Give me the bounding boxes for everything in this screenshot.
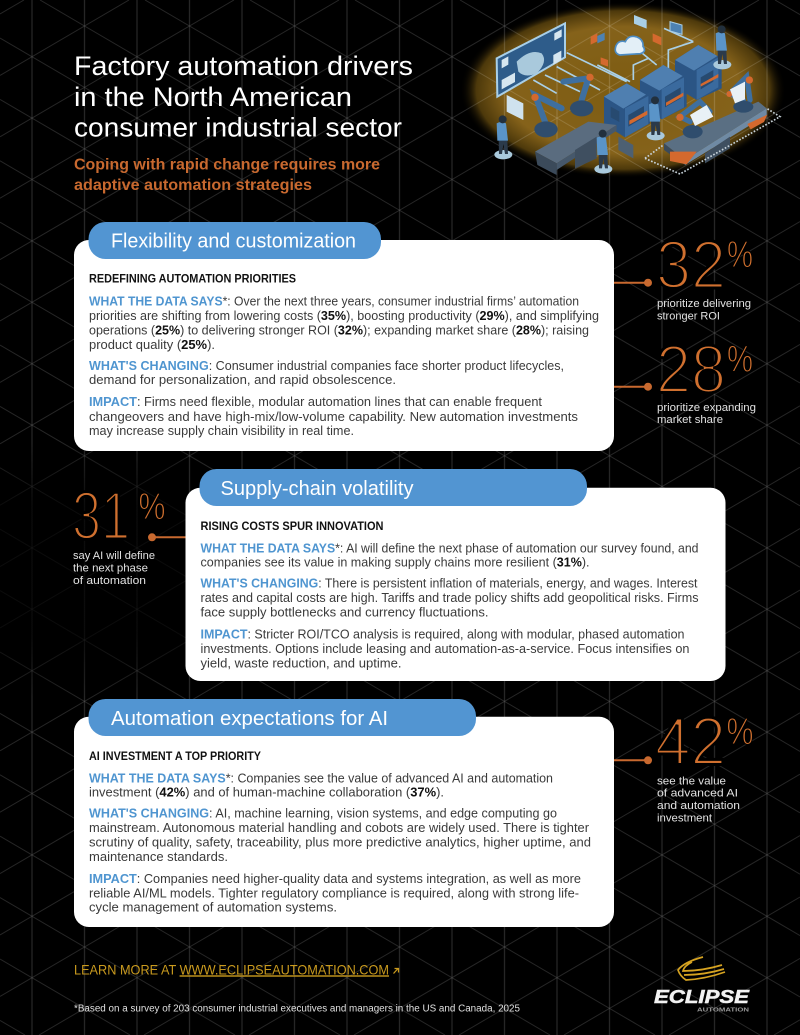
body: what's changing: mainstream. Autonomous material handling and cobots are widely used. There is tighter — [89, 821, 589, 835]
section pill heading — [88, 699, 476, 736]
body: what's changing: WHAT'S CHANGING: Consumer industrial companies face shorter product lifecycles, — [89, 359, 564, 373]
body: what's changing — [200, 577, 698, 620]
section pill heading: Flexibility and customization — [111, 231, 356, 253]
illustration: automated factory line — [494, 15, 780, 175]
body: what the data says: WHAT THE DATA SAYS*: AI will define the next phase of automation our survey found, and — [200, 541, 699, 555]
body: impact: changeovers and have high-mix/low-volume capability. New automation investments — [89, 410, 578, 424]
dotted track — [645, 108, 780, 174]
stat: 32% — [656, 227, 753, 322]
stat: 28%: % — [727, 339, 753, 381]
stat: 32%: prioritize delivering — [657, 298, 751, 310]
footnote: *Based on a survey of 203 consumer industrial executives and managers in the US and Canada, 2025 — [74, 1004, 520, 1015]
stat: 42%: % — [726, 711, 754, 753]
body: what's changing — [89, 359, 564, 387]
title: consumer industrial sector — [74, 113, 402, 143]
stat: 42% — [655, 703, 754, 825]
body: what the data says: WHAT THE DATA SAYS*: Over the next three years, consumer industrial firms’ automation — [89, 295, 579, 309]
stat: 42%: see the value — [657, 775, 726, 787]
right conveyor — [664, 102, 767, 165]
stat: 28% — [656, 332, 756, 426]
subtitle — [74, 156, 380, 194]
body: what's changing: scrutiny of quality, safety, traceability, plus more predictive analytics, higher uptime, and — [89, 835, 591, 849]
stat: 32%: 32 — [656, 227, 726, 303]
body: what the data says: product quality ( 25%). — [89, 338, 215, 352]
illustration: glow behind factory — [460, 2, 786, 178]
machine 1 — [604, 83, 650, 137]
stat: 28%: market share — [657, 414, 723, 426]
section pill heading — [200, 469, 587, 506]
section pill heading — [88, 222, 381, 259]
body: impact: IMPACT: Companies need higher-quality data and systems integration, as well as more — [89, 872, 581, 886]
connector: 31% — [148, 533, 186, 541]
logo: Eclipse Automation: ECLIPSE — [654, 987, 750, 1007]
robot bases and joints — [531, 74, 753, 138]
section pill heading: Supply-chain volatility — [220, 478, 414, 500]
body: impact: may increase supply chain visibility in real time. — [89, 424, 354, 438]
stat: 42%: and automation — [657, 800, 740, 812]
body: impact: IMPACT: Firms need flexible, modular automation lines that can enable frequent — [89, 395, 543, 409]
machine 2 — [640, 65, 687, 119]
panel: supply-chain volatility — [186, 469, 726, 681]
body: impact: investments. Options include leasing and automation-as-a-service. Focus intensifies on — [200, 642, 690, 656]
stat: 42%: of advanced AI — [657, 788, 738, 800]
body: what the data says — [89, 771, 553, 800]
body: what the data says: operations (25%) to delivering stronger ROI (32%); expanding market share (28%); raising — [89, 324, 589, 338]
body: impact: cycle management of automation systems. — [89, 901, 337, 915]
body: what the data says: priorities are shifting from lowering costs (35%), boosting productivity (29%), and simplifying — [89, 309, 599, 323]
stat: 28%: prioritize expanding — [657, 402, 756, 414]
logo: Eclipse Automation — [654, 957, 750, 1014]
title — [74, 51, 413, 143]
stat: 31%: 31 — [72, 478, 130, 554]
body: what the data says: companies see its value in making supply chains more resilient (31%). — [200, 556, 590, 570]
stat: 28%: 28 — [656, 332, 726, 408]
data connectors — [533, 28, 693, 93]
stat: 42%: 42 — [655, 703, 726, 779]
body: impact: yield, waste reduction, and uptime. — [200, 656, 402, 670]
robot arms — [535, 77, 750, 122]
stat: 31%: say AI will define — [73, 550, 155, 562]
body: what's changing: WHAT'S CHANGING: There is persistent inflation of materials, energy, and wages. Interest — [200, 577, 698, 591]
panel: automation expectations for AI — [74, 699, 614, 927]
subtitle: Coping with rapid change requires more — [74, 156, 380, 173]
logo: Eclipse Automation: AUTOMATION — [697, 1008, 749, 1014]
workers — [494, 25, 731, 174]
subheading: AI INVESTMENT A TOP PRIORITY — [89, 749, 261, 763]
stat: 32%: % — [727, 234, 753, 276]
body: impact: IMPACT: Stricter ROI/TCO analysis is required, along with modular, phased automation — [200, 627, 685, 641]
cloud icon — [615, 36, 644, 55]
stat: 32%: stronger ROI — [657, 310, 720, 322]
subheading: RISING COSTS SPUR INNOVATION — [200, 519, 384, 533]
body: what's changing: rates and capital costs are high. Tariffs and trade policy shifts add geopolitical risks. Firms — [200, 591, 698, 605]
left conveyor — [535, 122, 633, 175]
icon: gold swoosh — [678, 957, 725, 980]
body: impact — [89, 395, 578, 438]
stat: 31% — [72, 478, 166, 587]
learn more link: LEARN MORE AT WWW.ECLIPSEAUTOMATION.COM — [74, 961, 389, 977]
section pill heading: Automation expectations for AI — [111, 708, 388, 730]
subheading: REDEFINING AUTOMATION PRIORITIES — [89, 272, 296, 286]
body: what the data says: WHAT THE DATA SAYS*: Companies see the value of advanced AI and automation — [89, 771, 553, 785]
body: impact — [200, 627, 690, 670]
body: what the data says — [89, 295, 599, 352]
subtitle: adaptive automation strategies — [74, 177, 312, 194]
connector: 32% — [614, 279, 652, 287]
body: impact: reliable AI/ML models. Tighter regulatory compliance is required, along with strong life- — [89, 886, 579, 900]
title: in the North American — [74, 82, 352, 112]
icon: arrow — [394, 968, 398, 974]
monitor dashboard — [497, 23, 565, 97]
body: what's changing — [89, 807, 591, 864]
body: impact — [89, 872, 581, 915]
connector: 42% — [614, 756, 652, 764]
floating icons — [507, 15, 682, 120]
title: Factory automation drivers — [74, 51, 413, 81]
body: what's changing: demand for personalization, and rapid obsolescence. — [89, 373, 396, 387]
body: what's changing: maintenance standards. — [89, 850, 228, 864]
body: what's changing: face supply bottlenecks and currency fluctuations. — [200, 606, 488, 620]
stat: 31%: % — [138, 486, 166, 528]
panel: flexibility and customization — [74, 222, 614, 451]
stat: 31%: of automation — [73, 575, 146, 587]
connector: 28% — [614, 383, 652, 391]
machine 3 — [675, 45, 722, 100]
stat: 42%: investment — [657, 813, 713, 825]
body: what the data says: investment (42%) and of human-machine collaboration ( 37%). — [89, 786, 444, 800]
body: what the data says — [200, 541, 699, 570]
stat: 31%: the next phase — [73, 563, 148, 575]
body: what's changing: WHAT'S CHANGING: AI, machine learning, vision systems, and edge computing go — [89, 807, 557, 821]
